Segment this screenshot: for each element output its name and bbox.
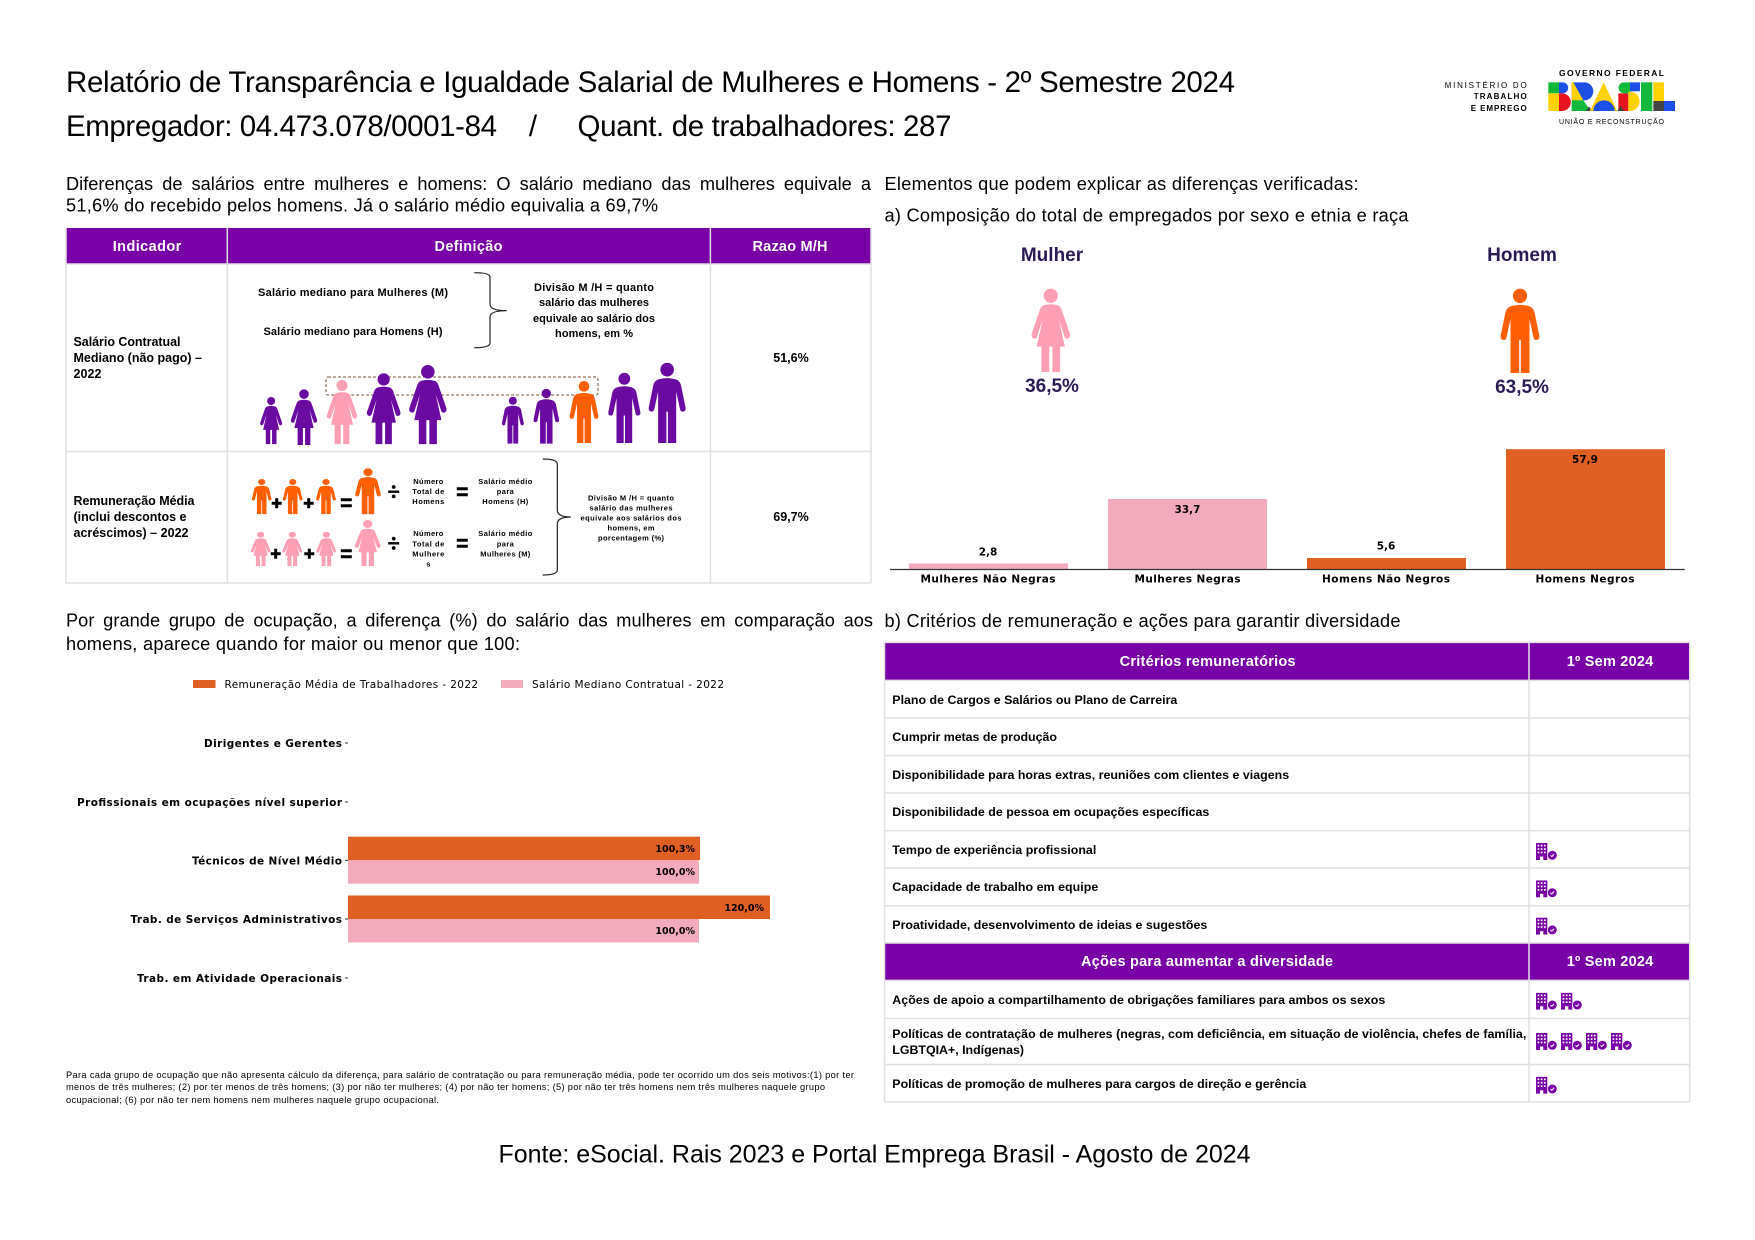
ação: promoção de mulheres (892, 1077, 1558, 1094)
ação: contratação de mulheres: Políticas de contratação de mulheres (negras, com deficiência, em situação de violência, chefes de família, (892, 1027, 1526, 1041)
composição: mulher: 36,5% (1025, 376, 1079, 397)
barra: mulheres negras: 33,7 (1175, 504, 1200, 516)
barras: técnicos de nível médio (348, 837, 700, 884)
barra: homens não negros (1307, 540, 1466, 586)
definição: remuneração média homens: Homens (412, 497, 444, 506)
legenda do gráfico de ocupação (193, 679, 724, 691)
definição: salário mediano: Salário mediano para Homens (H) (264, 326, 443, 338)
value: razão mediana: 51,6% (773, 351, 809, 365)
row label: remuneração média: (inclui descontos e (74, 510, 187, 524)
critério: proatividade (892, 918, 1558, 935)
definição: remuneração média homens: Total de (412, 487, 444, 496)
logo: ministério e governo federal: UNIÃO E RECONSTRUÇÃO (1559, 117, 1665, 126)
chave e divisão M/H da remuneração média: equivale aos salários dos (580, 514, 682, 523)
nota de rodapé: ocupacional; (6) por não ter nem homens nem mulheres naquele grupo ocupacional. (66, 1095, 439, 1105)
row label: salário contratual (74, 335, 202, 381)
gráfico de barras: sexo e raça (890, 449, 1685, 586)
legenda do gráfico de ocupação: Salário Mediano Contratual - 2022 (532, 679, 724, 691)
logo: ministério e governo federal: GOVERNO FEDERAL (1559, 68, 1664, 78)
definição: salário mediano: homens, em % (555, 328, 633, 340)
text: diferenças de salários: Diferenças de salários entre mulheres e homens: O salário mediano das mulheres equivale a (66, 174, 872, 194)
barra: mulheres negras: Mulheres Negras (1134, 574, 1240, 586)
critério: ocupações específicas: Disponibilidade de pessoa em ocupações específicas (892, 805, 1209, 819)
critério: plano de cargos: Plano de Cargos e Salários ou Plano de Carreira (892, 693, 1177, 707)
definição: remuneração média mulheres: Mulheres (M) (480, 550, 531, 559)
header: razão: Razao M/H (752, 239, 828, 255)
critério: proatividade: Proatividade, desenvolvimento de ideias e sugestões (892, 918, 1207, 932)
legenda do gráfico de ocupação: Remuneração Média de Trabalhadores - 2022 (224, 679, 478, 691)
composição: homem: 63,5% (1495, 377, 1549, 398)
cabeçalho: semestre ações: 1º Sem 2024 (1567, 954, 1653, 970)
categorias do eixo: Trab. de Serviços Administrativos (130, 914, 342, 926)
nota de rodapé (66, 1070, 854, 1105)
barra: mulheres não negras (909, 546, 1068, 586)
row label: salário contratual: 2022 (74, 367, 102, 381)
definição: remuneração média mulheres: Mulhere (412, 550, 444, 559)
barras: técnicos de nível médio: 100,3% (655, 844, 695, 855)
barras: serviços administrativos (348, 896, 770, 942)
row label: remuneração média: Remuneração Média (74, 494, 196, 508)
categorias do eixo: Técnicos de Nível Médio (192, 856, 342, 868)
header: definição: Definição (434, 239, 503, 255)
text: diferenças de salários (66, 174, 872, 216)
ilustração: fila de pessoas com mediana destacada (260, 363, 686, 445)
logo: ministério e governo federal: MINISTÉRIO DO (1445, 81, 1527, 90)
nota de rodapé: menos de três mulheres; (2) por ter menos de três homens; (3) por não ter mulheres; (4) por não ter homens; (5) por não ter três homens nem três mulheres naquele grupo (66, 1082, 825, 1092)
definição: remuneração média mulheres (251, 520, 533, 569)
definição: remuneração média mulheres: Salário médio (478, 529, 533, 538)
definição: remuneração média mulheres: Total de (412, 539, 444, 548)
categorias do eixo: Dirigentes e Gerentes (204, 738, 342, 750)
chave e divisão M/H da remuneração média: salário das mulheres (590, 503, 672, 512)
cabeçalho: semestre: 1º Sem 2024 (1567, 654, 1653, 670)
ação: promoção de mulheres: Políticas de promoção de mulheres para cargos de direção e gerência (892, 1077, 1306, 1091)
barra: homens negros: 57,9 (1572, 454, 1598, 466)
barras: técnicos de nível médio: 100,0% (655, 867, 695, 878)
definição: remuneração média homens: Salário médio (478, 477, 533, 486)
barras: serviços administrativos: 120,0% (724, 903, 764, 914)
definição: remuneração média homens (252, 468, 533, 514)
ação: contratação de mulheres (892, 1027, 1632, 1057)
heading: elementos que podem explicar: a) Composição do total de empregados por sexo e etnia e raça (884, 206, 1409, 226)
row label: remuneração média (74, 494, 196, 540)
ação: apoio familiar (892, 993, 1582, 1010)
categorias do eixo (77, 738, 348, 985)
title: / (529, 110, 538, 143)
barras: serviços administrativos: 100,0% (655, 926, 695, 937)
definição: remuneração média homens: para (497, 487, 515, 496)
composição: homem (1487, 245, 1557, 398)
categorias do eixo: Trab. em Atividade Operacionais (137, 973, 342, 985)
gráfico de barras por grupo de ocupação (77, 738, 770, 985)
barra: mulheres não negras: 2,8 (979, 546, 997, 558)
barra: mulheres negras (1108, 499, 1267, 586)
logo: ministério e governo federal (1445, 68, 1675, 126)
row label: salário contratual: Mediano (não pago) – (74, 351, 202, 365)
barra: homens negros: Homens Negros (1536, 574, 1634, 586)
composição: mulher: Mulher (1021, 245, 1084, 266)
logo: ministério e governo federal: TRABALHO (1474, 92, 1527, 101)
text: diferenças de salários: 51,6% do recebido pelos homens. Já o salário médio equivalia a 69,7% (66, 196, 658, 216)
ação: contratação de mulheres: LGBTQIA+, Indígenas) (892, 1043, 1024, 1057)
composição: mulher (1021, 245, 1084, 397)
barra: homens não negros: 5,6 (1377, 540, 1395, 552)
cabeçalho: critérios remuneratórios: Critérios remuneratórios (1120, 654, 1296, 670)
nota de rodapé: Para cada grupo de ocupação que não apresenta cálculo da diferença, para salário de contratação ou para remuneração média, pode ter ocorrido um dos seis motivos:(1) por ter (66, 1070, 854, 1080)
definição: remuneração média mulheres: Número (413, 529, 444, 538)
definição: salário mediano: Divisão M /H = quanto (534, 282, 654, 294)
panel: tabela de indicadores (66, 228, 871, 583)
cabeçalho: ações: Ações para aumentar a diversidade (1081, 954, 1333, 970)
definição: remuneração média homens: Número (413, 477, 444, 486)
ação: apoio familiar: Ações de apoio a compartilhamento de obrigações familiares para ambos os sexos (892, 993, 1385, 1007)
title (66, 66, 1235, 143)
chave e divisão M/H da remuneração média (543, 459, 682, 575)
barra: mulheres não negras: Mulheres Não Negras (920, 574, 1056, 586)
tabela: critérios e ações (884, 642, 1690, 1102)
chave e divisão M/H da remuneração média: homens, em (608, 524, 655, 533)
heading: critérios de remuneração: b) Critérios de remuneração e ações para garantir diversidade (884, 611, 1400, 631)
title: Empregador: 04.473.078/0001-84 (66, 110, 497, 143)
chave e divisão M/H da remuneração média: Divisão M /H = quanto (588, 493, 674, 502)
definição: remuneração média homens: Homens (H) (482, 497, 529, 506)
text: por grande grupo de ocupação: Por grande grupo de ocupação, a diferença (%) do salário das mulheres em comparação aos (66, 610, 873, 630)
critério: experiência: Tempo de experiência profissional (892, 843, 1096, 857)
critério: metas: Cumprir metas de produção (892, 730, 1057, 744)
fonte: Fonte: eSocial. Rais 2023 e Portal Emprega Brasil - Agosto de 2024 (498, 1140, 1251, 1168)
categorias do eixo: Profissionais em ocupações nível superior (77, 797, 343, 809)
definição: salário mediano: salário das mulheres (539, 297, 649, 309)
logo: ministério e governo federal: E EMPREGO (1471, 104, 1527, 113)
barra: homens não negros: Homens Não Negros (1322, 574, 1450, 586)
heading: elementos que podem explicar (884, 174, 1409, 226)
definição: remuneração média mulheres: para (497, 539, 515, 548)
definição: salário mediano: equivale ao salário dos (533, 313, 655, 325)
heading: elementos que podem explicar: Elementos que podem explicar as diferenças verificadas: (884, 174, 1358, 194)
critério: equipe: Capacidade de trabalho em equipe (892, 880, 1098, 894)
header: indicador: Indicador (113, 239, 182, 255)
row label: salário contratual: Salário Contratual (74, 335, 180, 349)
chave e divisão M/H da remuneração média: porcentagem (%) (598, 534, 664, 543)
critério: experiência (892, 843, 1558, 860)
title: Relatório de Transparência e Igualdade Salarial de Mulheres e Homens - 2º Semestre 2024 (66, 66, 1235, 99)
value: razão média: 69,7% (773, 510, 809, 524)
title: Quant. de trabalhadores: 287 (578, 110, 952, 143)
barra: homens negros (1506, 449, 1665, 586)
definição: salário mediano: Salário mediano para Mulheres (M) (258, 287, 448, 299)
definição: salário mediano (258, 273, 655, 348)
row label: remuneração média: acréscimos) – 2022 (74, 526, 189, 540)
composição: homem: Homem (1487, 245, 1557, 266)
critério: horas extras: Disponibilidade para horas extras, reuniões com clientes e viagens (892, 768, 1289, 782)
text: por grande grupo de ocupação: homens, aparece quando for maior ou menor que 100: (66, 634, 520, 654)
text: por grande grupo de ocupação (66, 610, 873, 654)
critério: equipe (892, 880, 1558, 898)
definição: remuneração média mulheres: s (426, 560, 430, 569)
